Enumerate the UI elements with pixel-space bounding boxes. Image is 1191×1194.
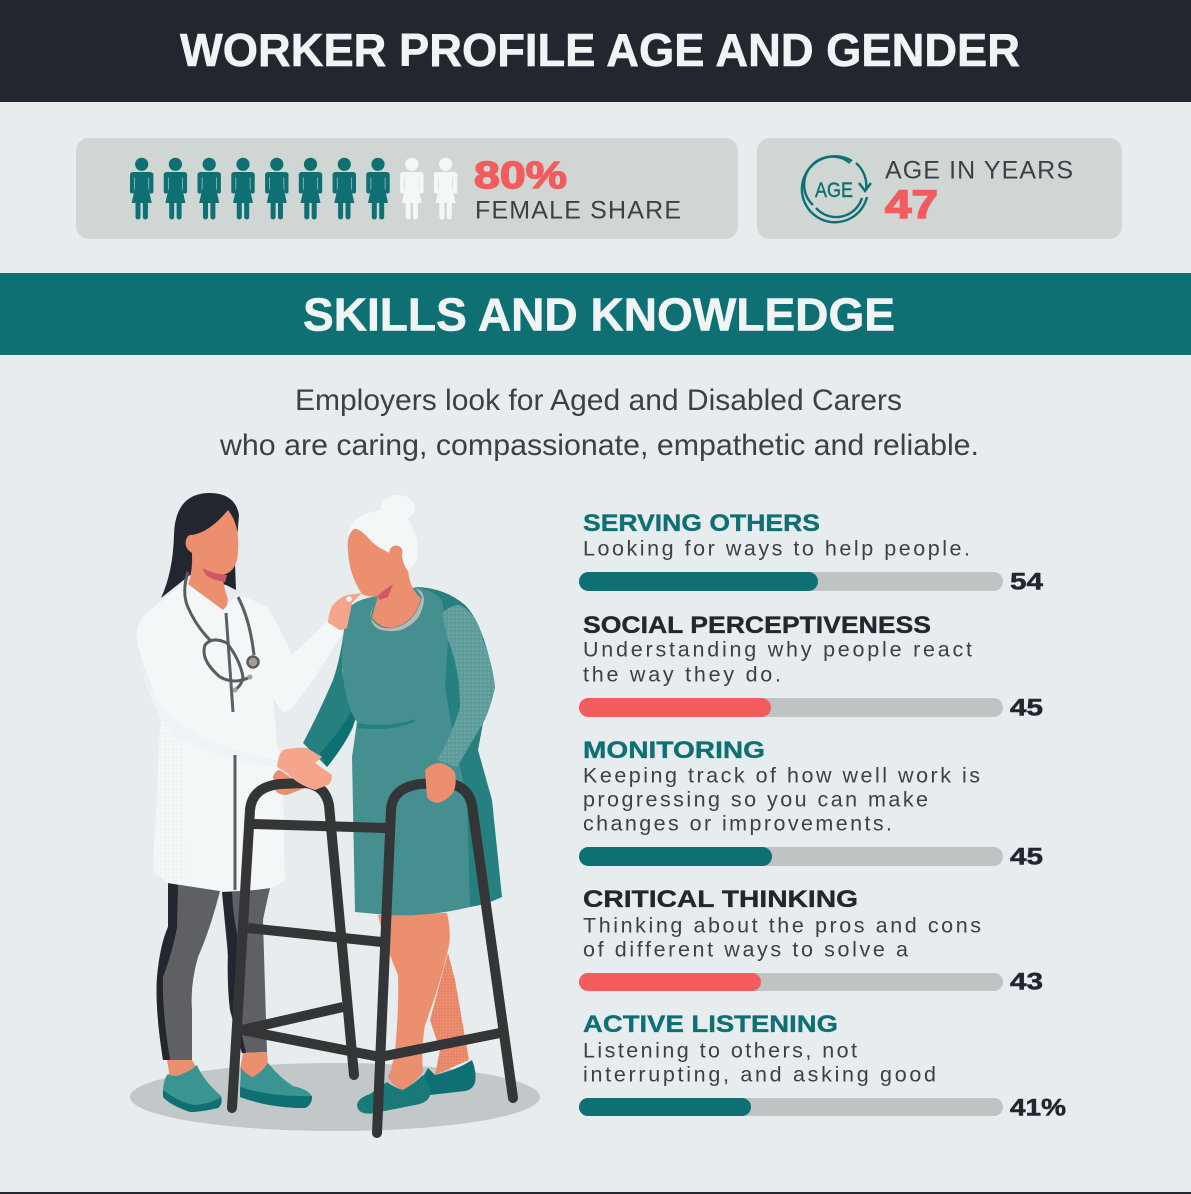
elderly woman: front leg and shoe bbox=[357, 913, 450, 1114]
skill: critical thinking: Thinking about the pros and cons bbox=[583, 914, 981, 938]
intro text bbox=[219, 384, 979, 462]
coat zipper bbox=[226, 613, 235, 890]
bar: 45 bbox=[579, 847, 1003, 866]
skill: monitoring: changes or improvements. bbox=[583, 812, 892, 836]
intro text: Employers look for Aged and Disabled Carers bbox=[295, 384, 902, 417]
section band: skills and knowledge bbox=[0, 273, 1191, 355]
skill: serving others bbox=[579, 510, 1044, 596]
skill: monitoring: MONITORING bbox=[583, 737, 765, 764]
skill: social perceptiveness bbox=[579, 612, 1043, 722]
walker frame bbox=[232, 783, 513, 1133]
skill: serving others: 54 bbox=[1010, 568, 1044, 596]
skill: serving others: SERVING OTHERS bbox=[583, 510, 820, 537]
doctor: legs bbox=[157, 883, 270, 1078]
skill: serving others: Looking for ways to help people. bbox=[583, 536, 970, 560]
elderly woman: hand on right handle bbox=[425, 763, 456, 803]
bar: 43 bbox=[579, 973, 1003, 991]
icon row: teal women bbox=[130, 158, 390, 220]
stethoscope bbox=[185, 572, 258, 692]
elderly woman: back leg and shoe bbox=[423, 953, 476, 1095]
skill: social perceptiveness: Understanding why people react bbox=[583, 638, 972, 662]
skill: active listening: interrupting, and asking good bbox=[583, 1062, 936, 1086]
skill: monitoring bbox=[579, 737, 1043, 870]
elderly woman: hair bbox=[347, 495, 418, 571]
icon row: white women bbox=[400, 158, 457, 220]
ground shadow bbox=[130, 1063, 540, 1131]
header band bbox=[0, 0, 1191, 102]
label: age in years: AGE IN YEARS bbox=[885, 156, 1073, 184]
doctor: shoes bbox=[163, 1063, 312, 1112]
stat: 80%: 80% bbox=[474, 155, 567, 197]
elderly woman: head and neck bbox=[348, 528, 424, 631]
doctor: hair and head bbox=[161, 493, 239, 625]
skill: social perceptiveness: 45 bbox=[1010, 694, 1043, 722]
skill: active listening: Listening to others, not bbox=[583, 1038, 857, 1062]
icon: age cycle bbox=[802, 156, 871, 222]
doctor: white coat bbox=[137, 582, 343, 891]
illustration: doctor helping elderly woman with walker bbox=[130, 493, 540, 1133]
title: WORKER PROFILE AGE AND GENDER bbox=[180, 24, 1020, 76]
elderly woman: ear bbox=[390, 546, 402, 558]
skill: monitoring: progressing so you can make bbox=[583, 788, 928, 812]
elderly woman: dress bbox=[303, 587, 502, 915]
skill: social perceptiveness: SOCIAL PERCEPTIVENESS bbox=[583, 612, 931, 639]
section heading: SKILLS AND KNOWLEDGE bbox=[303, 288, 895, 340]
stat: 47: 47 bbox=[885, 183, 938, 227]
skill: active listening: 41% bbox=[1010, 1094, 1066, 1122]
elderly woman: hand on walker bbox=[273, 770, 305, 795]
panel: female share bbox=[76, 138, 738, 239]
bar: 54 bbox=[579, 572, 1003, 591]
skill: active listening: ACTIVE LISTENING bbox=[583, 1011, 838, 1038]
skill: active listening bbox=[579, 1011, 1066, 1122]
panel: age bbox=[757, 138, 1122, 239]
skill: critical thinking: 43 bbox=[1010, 968, 1043, 996]
skill: monitoring: 45 bbox=[1010, 844, 1043, 870]
skill: critical thinking: CRITICAL THINKING bbox=[583, 886, 858, 913]
ring highlight bbox=[346, 596, 352, 602]
icon: age cycle: AGE bbox=[815, 179, 853, 202]
bar: 45 bbox=[579, 698, 1003, 717]
bar: 41% bbox=[579, 1098, 1003, 1116]
skill: critical thinking bbox=[579, 886, 1043, 996]
skill: critical thinking: of different ways to solve a bbox=[583, 938, 908, 962]
skill: monitoring: Keeping track of how well work is bbox=[583, 764, 980, 788]
skill: social perceptiveness: the way they do. bbox=[583, 662, 781, 686]
doctor: hand at neck bbox=[328, 593, 362, 632]
intro text: who are caring, compassionate, empathetic and reliable. bbox=[219, 429, 979, 462]
label: female share: FEMALE SHARE bbox=[475, 196, 681, 224]
doctor: hand on patient's hand bbox=[277, 748, 332, 790]
